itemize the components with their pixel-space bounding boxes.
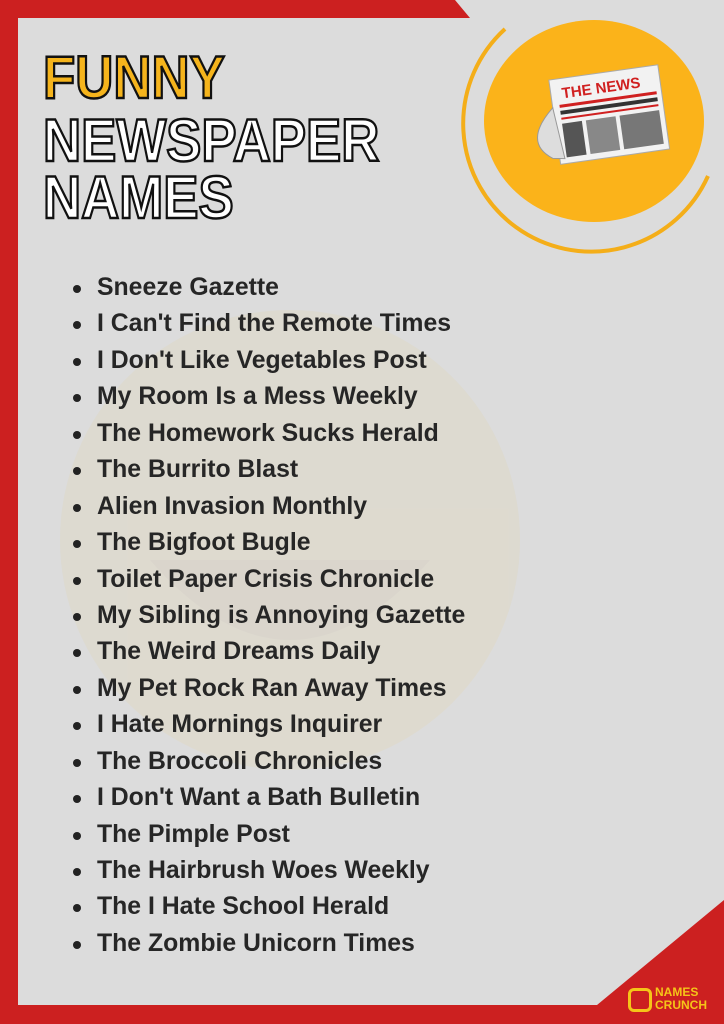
icon: newspaper circle: THE NEWS: [561, 75, 641, 102]
list of names: My Room Is a Mess Weekly: [97, 383, 418, 410]
list of names: I Don't Like Vegetables Post: [97, 347, 427, 374]
logo: CRUNCH: [655, 998, 707, 1012]
list of names: The Pimple Post: [97, 821, 290, 848]
list of names: The I Hate School Herald: [97, 893, 389, 920]
list of names: I Don't Want a Bath Bulletin: [97, 784, 420, 811]
title: NEWSPAPER: [43, 107, 379, 174]
list of names: The Burrito Blast: [97, 456, 298, 483]
icon: newspaper circle: [463, 20, 708, 252]
list of names: The Broccoli Chronicles: [97, 748, 382, 775]
list of names: My Pet Rock Ran Away Times: [97, 675, 447, 702]
title: FUNNY: [43, 44, 225, 111]
list of names: The Zombie Unicorn Times: [97, 930, 415, 957]
list of names: The Hairbrush Woes Weekly: [97, 857, 430, 884]
list of names: Toilet Paper Crisis Chronicle: [97, 566, 434, 592]
list of names: [73, 274, 465, 957]
list of names: Alien Invasion Monthly: [97, 493, 367, 520]
watermark emoji: [60, 310, 520, 770]
list of names: The Weird Dreams Daily: [97, 638, 380, 665]
title: NAMES: [43, 164, 234, 231]
list of names: My Sibling is Annoying Gazette: [97, 602, 465, 629]
logo: [628, 985, 707, 1012]
logo: NAMES: [655, 985, 698, 999]
list of names: The Bigfoot Bugle: [97, 529, 310, 556]
list of names: The Homework Sucks Herald: [97, 420, 439, 447]
title: [43, 44, 380, 231]
list of names: Sneeze Gazette: [97, 274, 279, 301]
list of names: I Hate Mornings Inquirer: [97, 711, 382, 738]
list of names: I Can't Find the Remote Times: [97, 310, 451, 337]
